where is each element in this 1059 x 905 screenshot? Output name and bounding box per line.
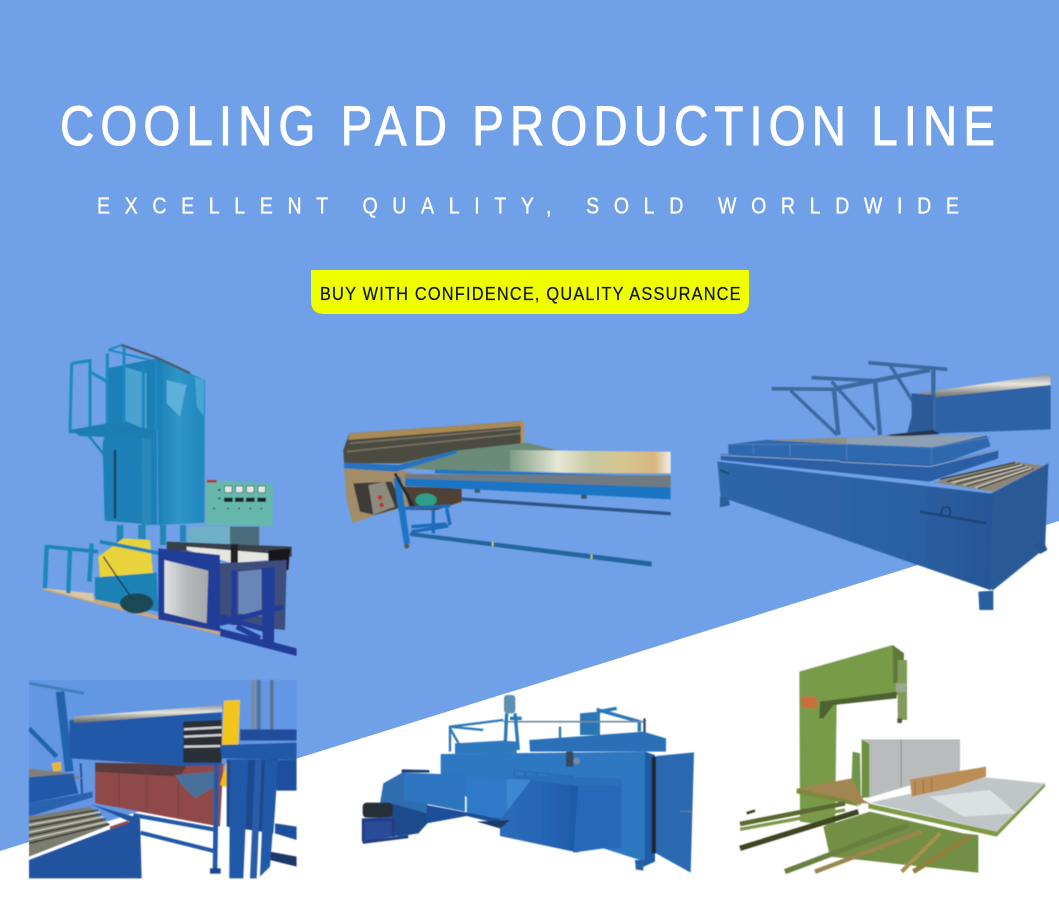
machine photo: green vertical band saw with cutting table (740, 645, 1045, 873)
subtitle: EXCELLENT QUALITY, SOLD WORLDWIDE (97, 193, 959, 219)
machine photo: roller section with brown pad (29, 677, 310, 878)
machine photo: blue oven with roller conveyor (717, 363, 1051, 610)
background: white diagonal lower field (0, 521, 1059, 905)
machine photo: corrugating conveyor table (343, 421, 671, 567)
machine photo: vertical curing tower with control box (43, 345, 297, 656)
badge text: BUY WITH CONFIDENCE, QUALITY ASSURANCE (320, 283, 741, 304)
title: COOLING PAD PRODUCTION LINE (60, 95, 995, 158)
machine photo: blower and duct dryer (363, 695, 694, 873)
yellow badge (311, 270, 749, 314)
